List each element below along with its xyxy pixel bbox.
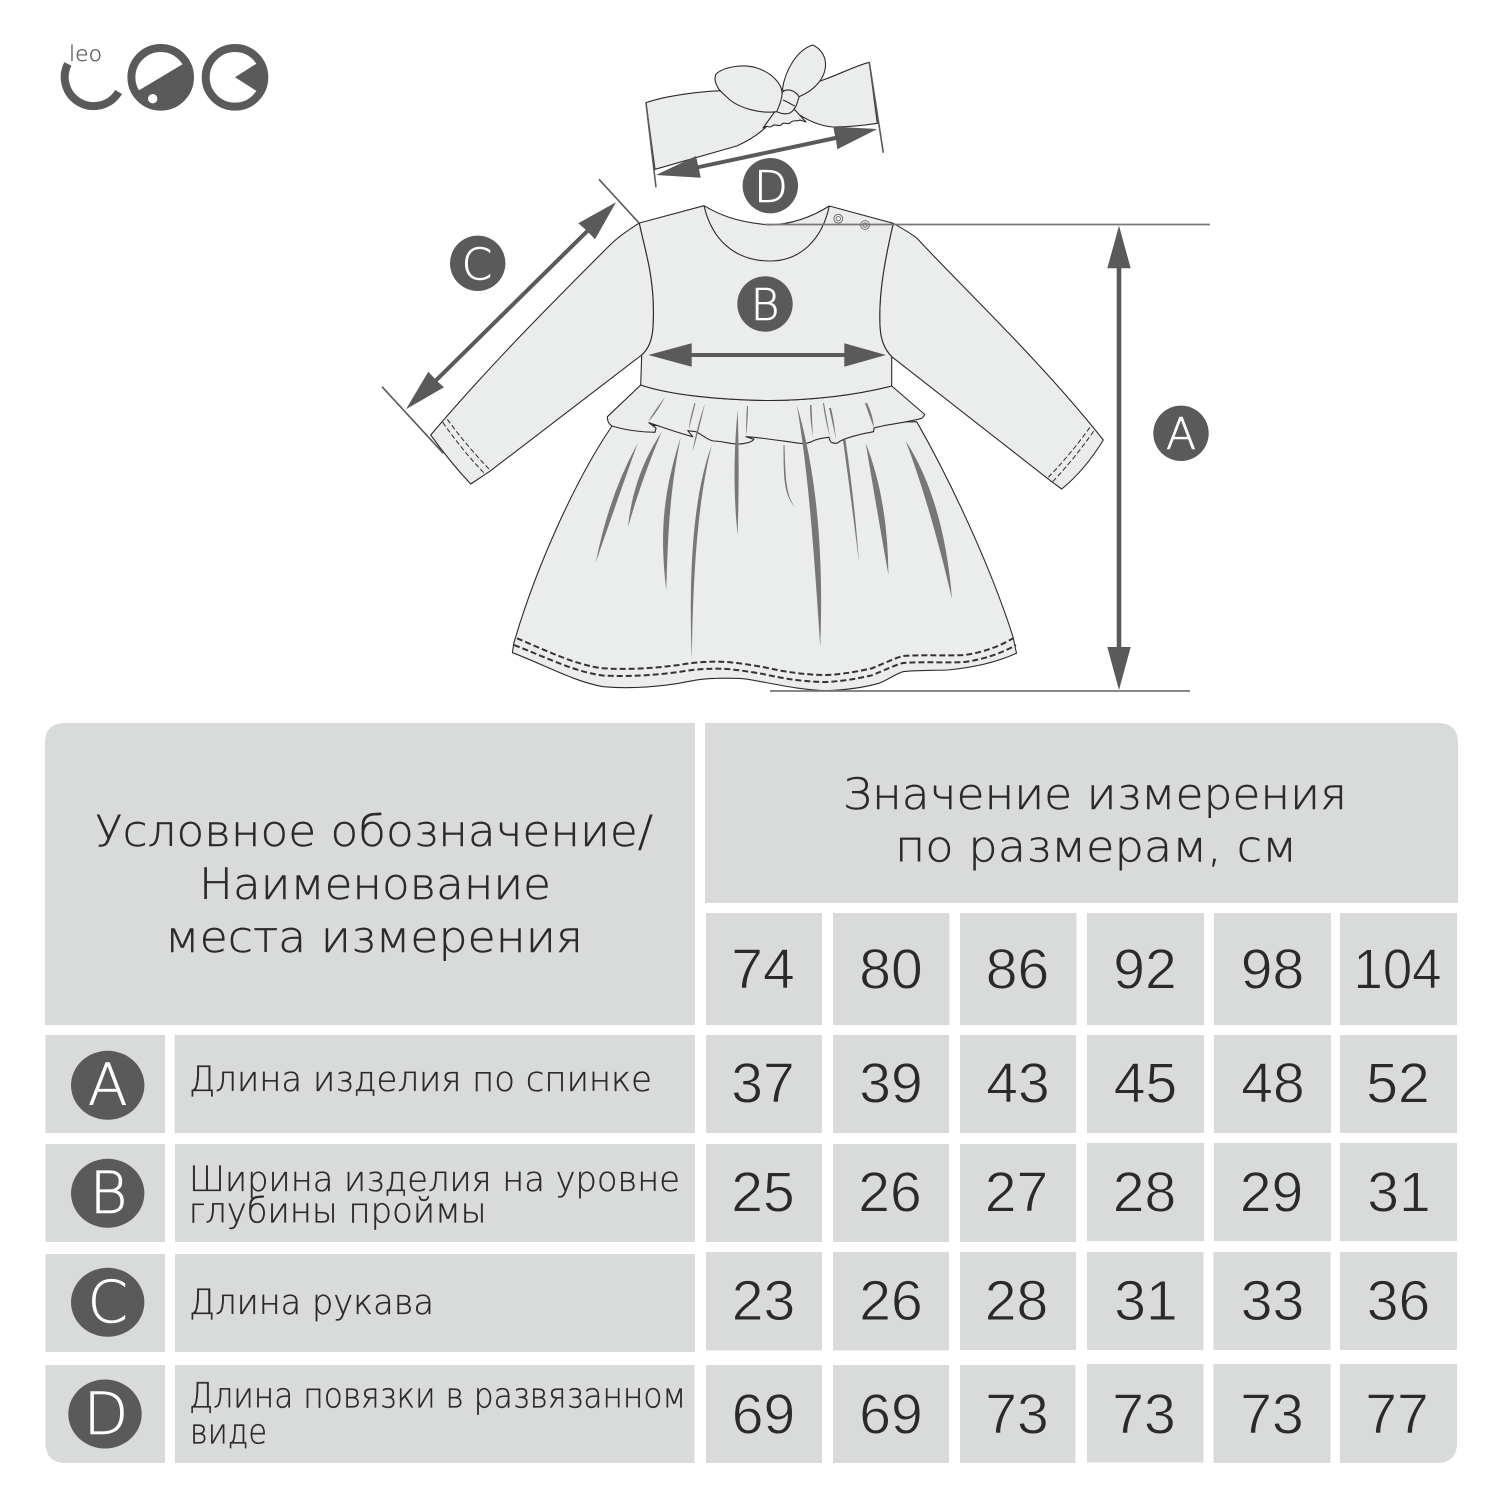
right cuff stitching — [1048, 427, 1094, 482]
skirt folds — [596, 432, 952, 660]
row A — [46, 1035, 1457, 1133]
row C values: 26 — [859, 1269, 923, 1333]
logo: leo — [65, 42, 264, 107]
shoulder buttons — [834, 214, 869, 229]
size table — [45, 723, 1458, 1463]
heading text lines: Условное обозначение/ — [95, 807, 653, 857]
peplum ruffle — [607, 385, 924, 444]
row D values — [706, 1364, 1457, 1463]
knot — [777, 90, 799, 114]
badge D: D — [754, 162, 788, 213]
row D — [46, 1364, 1457, 1463]
badge D — [743, 158, 798, 213]
row D label: виде — [190, 1412, 267, 1452]
size header row: 74 — [731, 937, 795, 1001]
measurement C: sleeve arrow — [382, 179, 639, 453]
row B — [46, 1143, 1457, 1242]
row B label: глубины проймы — [188, 1191, 486, 1231]
row B values: 28 — [1113, 1161, 1176, 1225]
row C badge — [71, 1268, 144, 1337]
right sleeve — [880, 223, 1103, 489]
row A values: 45 — [1114, 1052, 1177, 1116]
band width arrow — [646, 62, 883, 187]
row C badge: C — [87, 1268, 128, 1336]
row A values: 39 — [859, 1052, 923, 1116]
row C values: 36 — [1367, 1269, 1430, 1333]
row B values — [706, 1143, 1457, 1242]
size header row — [706, 913, 1457, 1025]
top loop — [782, 45, 826, 97]
row B values: 29 — [1240, 1161, 1303, 1225]
row C values: 31 — [1114, 1269, 1178, 1333]
logo arc — [65, 64, 119, 106]
heading text lines — [843, 770, 1347, 873]
headband drawing — [646, 45, 883, 187]
row D values: 69 — [732, 1382, 795, 1446]
logo word: leo — [69, 42, 102, 66]
size header row: 80 — [859, 937, 923, 1001]
size header row: 98 — [1241, 937, 1304, 1001]
row C label: Длина рукава — [189, 1283, 434, 1323]
badge C — [450, 236, 505, 291]
badge A: A — [1166, 409, 1196, 460]
row D badge: D — [84, 1380, 128, 1448]
heading text lines: Наименование — [199, 860, 551, 910]
row A values — [706, 1035, 1457, 1133]
band — [646, 62, 877, 169]
row B badge: B — [90, 1159, 127, 1227]
row D values: 73 — [985, 1382, 1049, 1446]
bodice — [639, 206, 893, 400]
badge B: B — [751, 280, 779, 331]
logo half circle with dot — [131, 48, 191, 107]
row B label — [188, 1160, 680, 1231]
hem stitching — [514, 638, 1016, 682]
row D label — [189, 1376, 686, 1452]
row D values: 77 — [1365, 1382, 1429, 1446]
row A values: 48 — [1241, 1052, 1305, 1116]
long folds over the ruffle — [735, 405, 821, 647]
logo circle with wedge — [206, 48, 264, 107]
measurement A: length — [765, 224, 1210, 691]
badge A — [1153, 406, 1209, 461]
heading text lines: Значение измерения — [843, 770, 1347, 820]
row D values: 69 — [859, 1382, 923, 1446]
row D values: 73 — [1112, 1382, 1176, 1446]
row B values: 27 — [985, 1161, 1048, 1225]
row B values: 26 — [858, 1161, 922, 1225]
row B badge — [71, 1159, 144, 1228]
header: values — [705, 723, 1458, 903]
heading text lines: места измерения — [165, 913, 583, 963]
row C values: 23 — [732, 1269, 795, 1333]
row B label: Ширина изделия на уровне — [189, 1160, 680, 1200]
row A badge — [71, 1051, 144, 1120]
size header row: 92 — [1113, 937, 1177, 1001]
skirt — [512, 422, 1016, 691]
row A label: Длина изделия по спинке — [189, 1060, 652, 1100]
row A values: 43 — [986, 1052, 1050, 1116]
row A values: 52 — [1366, 1052, 1430, 1116]
row A values: 37 — [731, 1052, 795, 1116]
row D badge — [68, 1380, 142, 1448]
left cuff stitching — [443, 419, 489, 473]
row D values: 73 — [1240, 1382, 1304, 1446]
row A badge: A — [88, 1051, 128, 1119]
dress drawing — [431, 206, 1103, 691]
row C values: 33 — [1241, 1269, 1304, 1333]
measurement B: width arrow — [648, 343, 886, 367]
row D label: Длина повязки в развязанном — [189, 1376, 686, 1416]
badge B — [737, 276, 793, 332]
frill — [763, 110, 806, 128]
left loop — [715, 66, 782, 112]
peplum gathers — [648, 397, 874, 452]
header: designation — [45, 723, 695, 1025]
neckline — [704, 206, 829, 261]
row C values — [706, 1252, 1457, 1350]
size header row: 86 — [986, 937, 1049, 1001]
size header row: 104 — [1354, 937, 1442, 1001]
heading text lines — [95, 807, 653, 963]
row B values: 25 — [731, 1161, 795, 1225]
row B values: 31 — [1367, 1161, 1431, 1225]
row C — [46, 1252, 1457, 1352]
row C values: 28 — [985, 1269, 1048, 1333]
badge C: C — [462, 240, 492, 290]
left sleeve — [431, 223, 653, 484]
heading text lines: по размерам, см — [895, 823, 1297, 873]
